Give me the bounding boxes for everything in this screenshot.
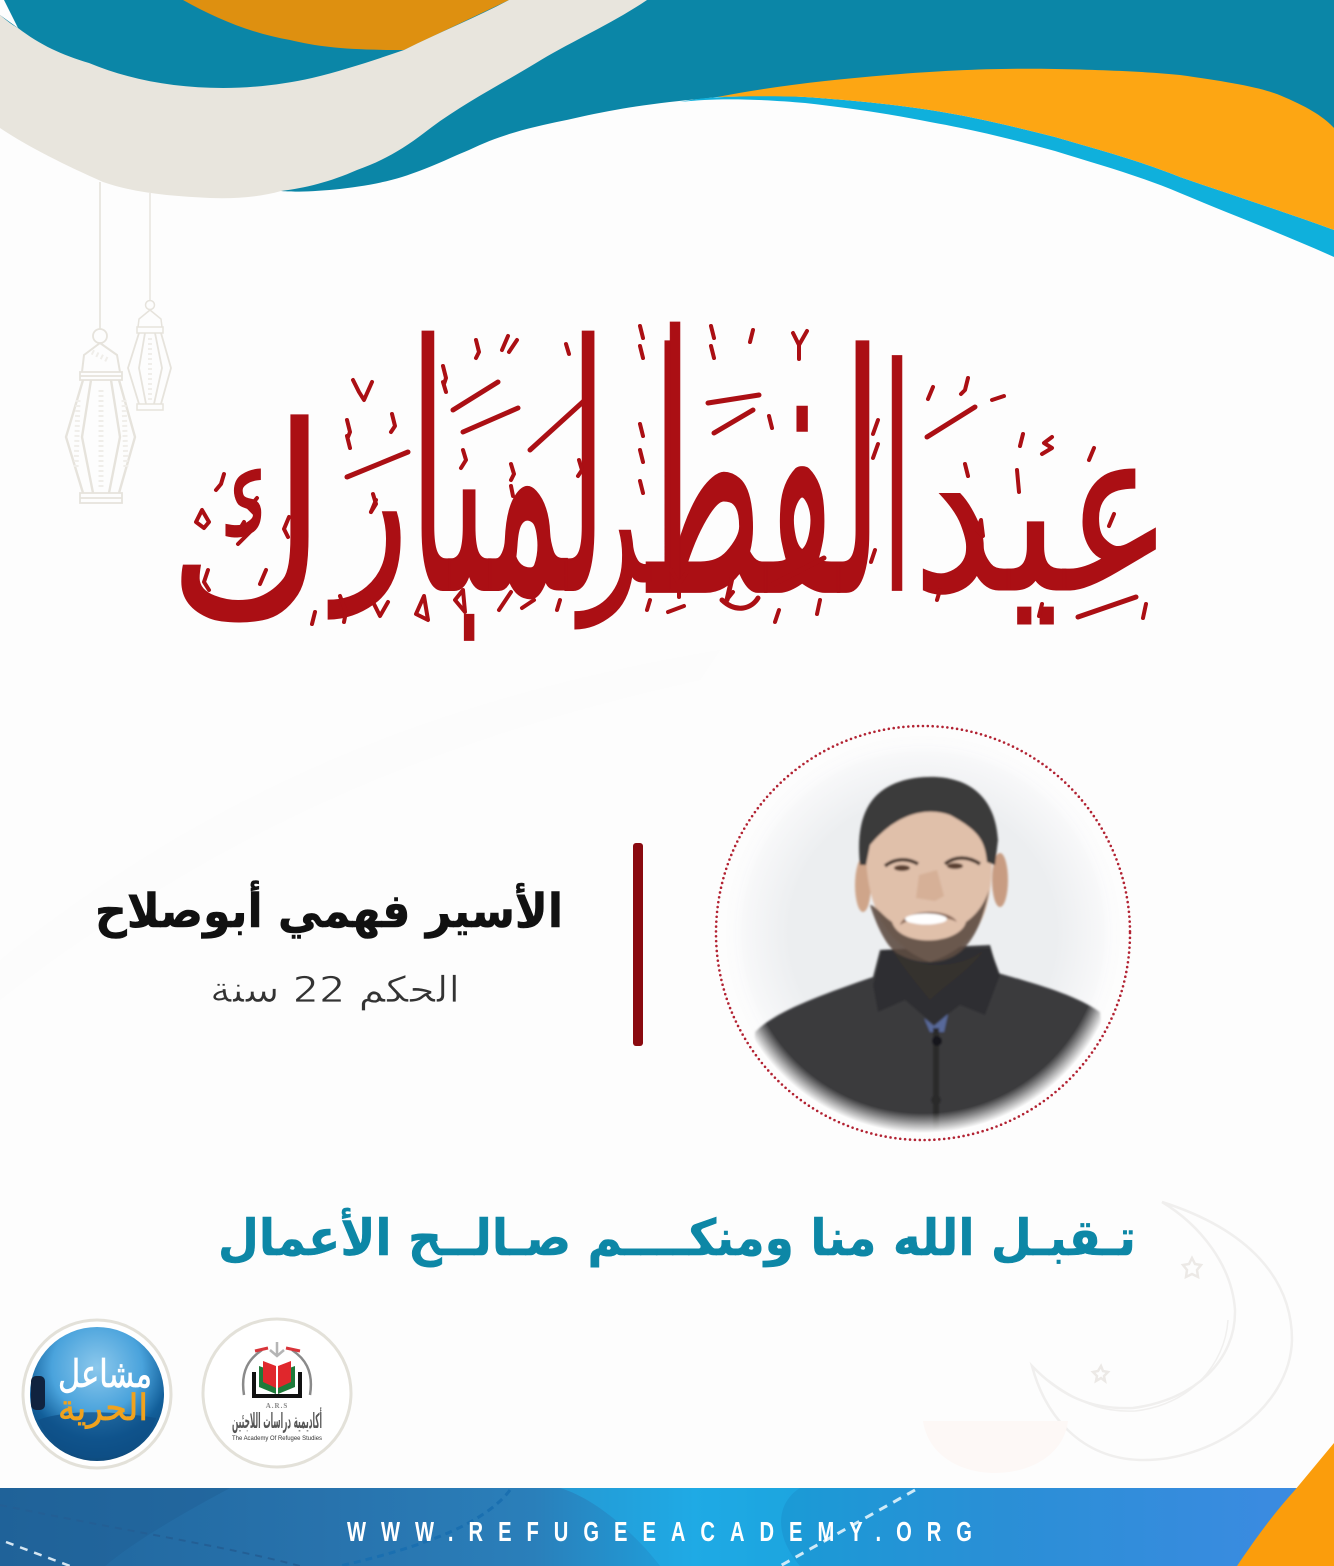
logo: Academy of Refugee Studies: أكاديمية دراسات اللاجئين xyxy=(232,1408,322,1434)
icon: lanterns xyxy=(66,182,171,503)
word: al-Mubarak, ra: ر xyxy=(328,375,410,619)
man portrait xyxy=(754,775,1102,1132)
faint blob xyxy=(923,1421,1068,1473)
logo: Masha'il al-Hurriya: الحرية xyxy=(58,1386,148,1429)
sentence text: الحكم 22 سنة xyxy=(210,970,460,1011)
light blue wave xyxy=(680,96,1334,257)
top wave header xyxy=(0,0,1334,257)
dotted ring xyxy=(716,726,1130,1140)
website url: WWW.REFUGEEACADEMY.ORG xyxy=(347,1517,972,1548)
word: al-Fitr, ra: ‍ر xyxy=(574,403,652,630)
word: al-Mubarak, kaf: ك xyxy=(168,371,328,678)
portrait photo xyxy=(754,764,1102,1132)
word: Eid: عيد xyxy=(912,375,1174,646)
word: al-Mubarak, middle: لمبا xyxy=(410,275,606,671)
calligraphy fatha strokes xyxy=(347,382,1136,617)
logo: Academy of Refugee Studies xyxy=(203,1319,351,1467)
orange corner triangle xyxy=(1237,1443,1334,1566)
logo: Academy of Refugee Studies: The Academy Of Refugee Studies xyxy=(232,1436,322,1442)
word: al-Mubarak, alif: ا xyxy=(660,265,690,674)
logo: Academy of Refugee Studies: A.R.S xyxy=(266,1402,288,1410)
book emblem xyxy=(243,1342,311,1398)
faint background sweep xyxy=(0,650,720,1000)
crescent moon decoration xyxy=(1032,1202,1292,1460)
title calligraphy: Eid al-Fitr al-Mubarak xyxy=(168,265,1174,678)
calligraphy ornaments xyxy=(196,326,1146,624)
footer band xyxy=(0,1488,1334,1566)
logo: Masha'il al-Hurriya xyxy=(23,1320,171,1468)
dark orange wave xyxy=(183,0,509,50)
word: al-Fitr, lam-fa-ta: لفط‍ xyxy=(646,287,882,671)
logo: Masha'il al-Hurriya: مشاعل xyxy=(58,1352,152,1397)
word: al-Fitr, alif: ا xyxy=(882,304,912,663)
divider bar xyxy=(633,843,643,1046)
cream wave xyxy=(0,0,647,198)
orange wave xyxy=(717,69,1334,230)
greeting line: تـقبـل الله منا ومنكــــم صـالــح الأعمال xyxy=(218,1207,1136,1268)
prisoner name: الأسير فهمي أبوصلاح xyxy=(95,880,563,939)
